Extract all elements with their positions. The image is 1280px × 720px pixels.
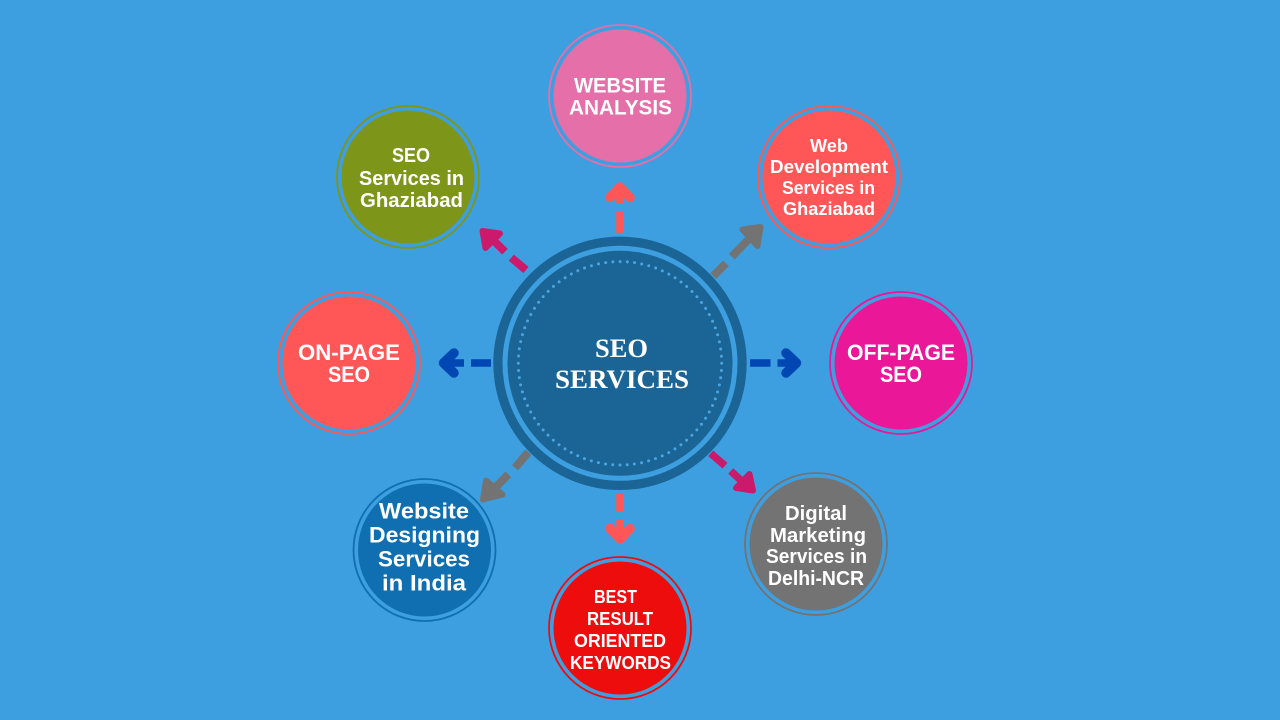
label: Website Designing Services in India: Services <box>378 546 470 572</box>
label: On-Page SEO: SEO <box>328 362 370 387</box>
arrow: to Digital Marketing <box>711 453 753 490</box>
label: Best Result Oriented Keywords: RESULT <box>587 609 653 629</box>
label: SEO Services in Ghaziabad: SEO <box>392 145 430 167</box>
label: Website Analysis: WEBSITE <box>574 74 666 98</box>
node: Website Analysis <box>549 25 691 167</box>
node: SEO Services in Ghaziabad <box>337 106 479 248</box>
label: Website Analysis: ANALYSIS <box>569 96 672 120</box>
hub title: SEO <box>595 334 648 363</box>
label: Web Development Services in Ghaziabad: Development <box>770 157 888 177</box>
arrow: right to Off-Page SEO <box>750 353 796 373</box>
label: SEO Services in Ghaziabad: Services in <box>359 168 464 190</box>
label: Off-Page SEO: SEO <box>880 362 922 387</box>
arrow: to SEO Services in Ghaziabad <box>482 231 526 270</box>
label: On-Page SEO: ON-PAGE <box>298 340 400 365</box>
label: Off-Page SEO: OFF-PAGE <box>847 340 955 365</box>
label: Web Development Services in Ghaziabad: Web <box>810 136 848 156</box>
label: SEO Services in Ghaziabad: Ghaziabad <box>360 190 463 212</box>
label: Web Development Services in Ghaziabad: Services in <box>782 178 875 198</box>
hub title: SERVICES <box>555 365 689 394</box>
label: Website Designing Services in India: Designing <box>369 522 480 548</box>
arrow: up to Website Analysis <box>610 187 630 233</box>
arrow: to Website Designing <box>483 452 528 500</box>
label: Website Designing Services in India: Website <box>379 498 469 524</box>
label: Digital Marketing Services in Delhi-NCR: Marketing <box>770 525 866 547</box>
label: Website Designing Services in India: in India <box>382 570 467 596</box>
central hub: SEO Services <box>493 237 747 490</box>
label: Best Result Oriented Keywords: ORIENTED <box>574 631 666 651</box>
arrow: to Web Development <box>713 227 760 276</box>
node: Off-Page SEO <box>830 292 972 434</box>
node: On-Page SEO <box>278 292 420 434</box>
label: Best Result Oriented Keywords: KEYWORDS <box>570 653 671 673</box>
node: Website Designing Services in India <box>354 479 496 621</box>
node: Digital Marketing Services in Delhi-NCR <box>745 473 887 615</box>
node: Web Development Services in Ghaziabad <box>758 106 900 248</box>
label: Digital Marketing Services in Delhi-NCR: Services in <box>766 546 867 568</box>
label: Best Result Oriented Keywords: BEST <box>594 587 637 607</box>
label: Digital Marketing Services in Delhi-NCR: Digital <box>785 503 847 525</box>
arrow: down to Best Result Keywords <box>610 493 630 539</box>
arrow: left to On-Page SEO <box>444 353 491 373</box>
node: Best Result Oriented Keywords <box>549 557 691 699</box>
label: Web Development Services in Ghaziabad: Ghaziabad <box>783 199 875 219</box>
label: Digital Marketing Services in Delhi-NCR: Delhi-NCR <box>768 568 865 590</box>
